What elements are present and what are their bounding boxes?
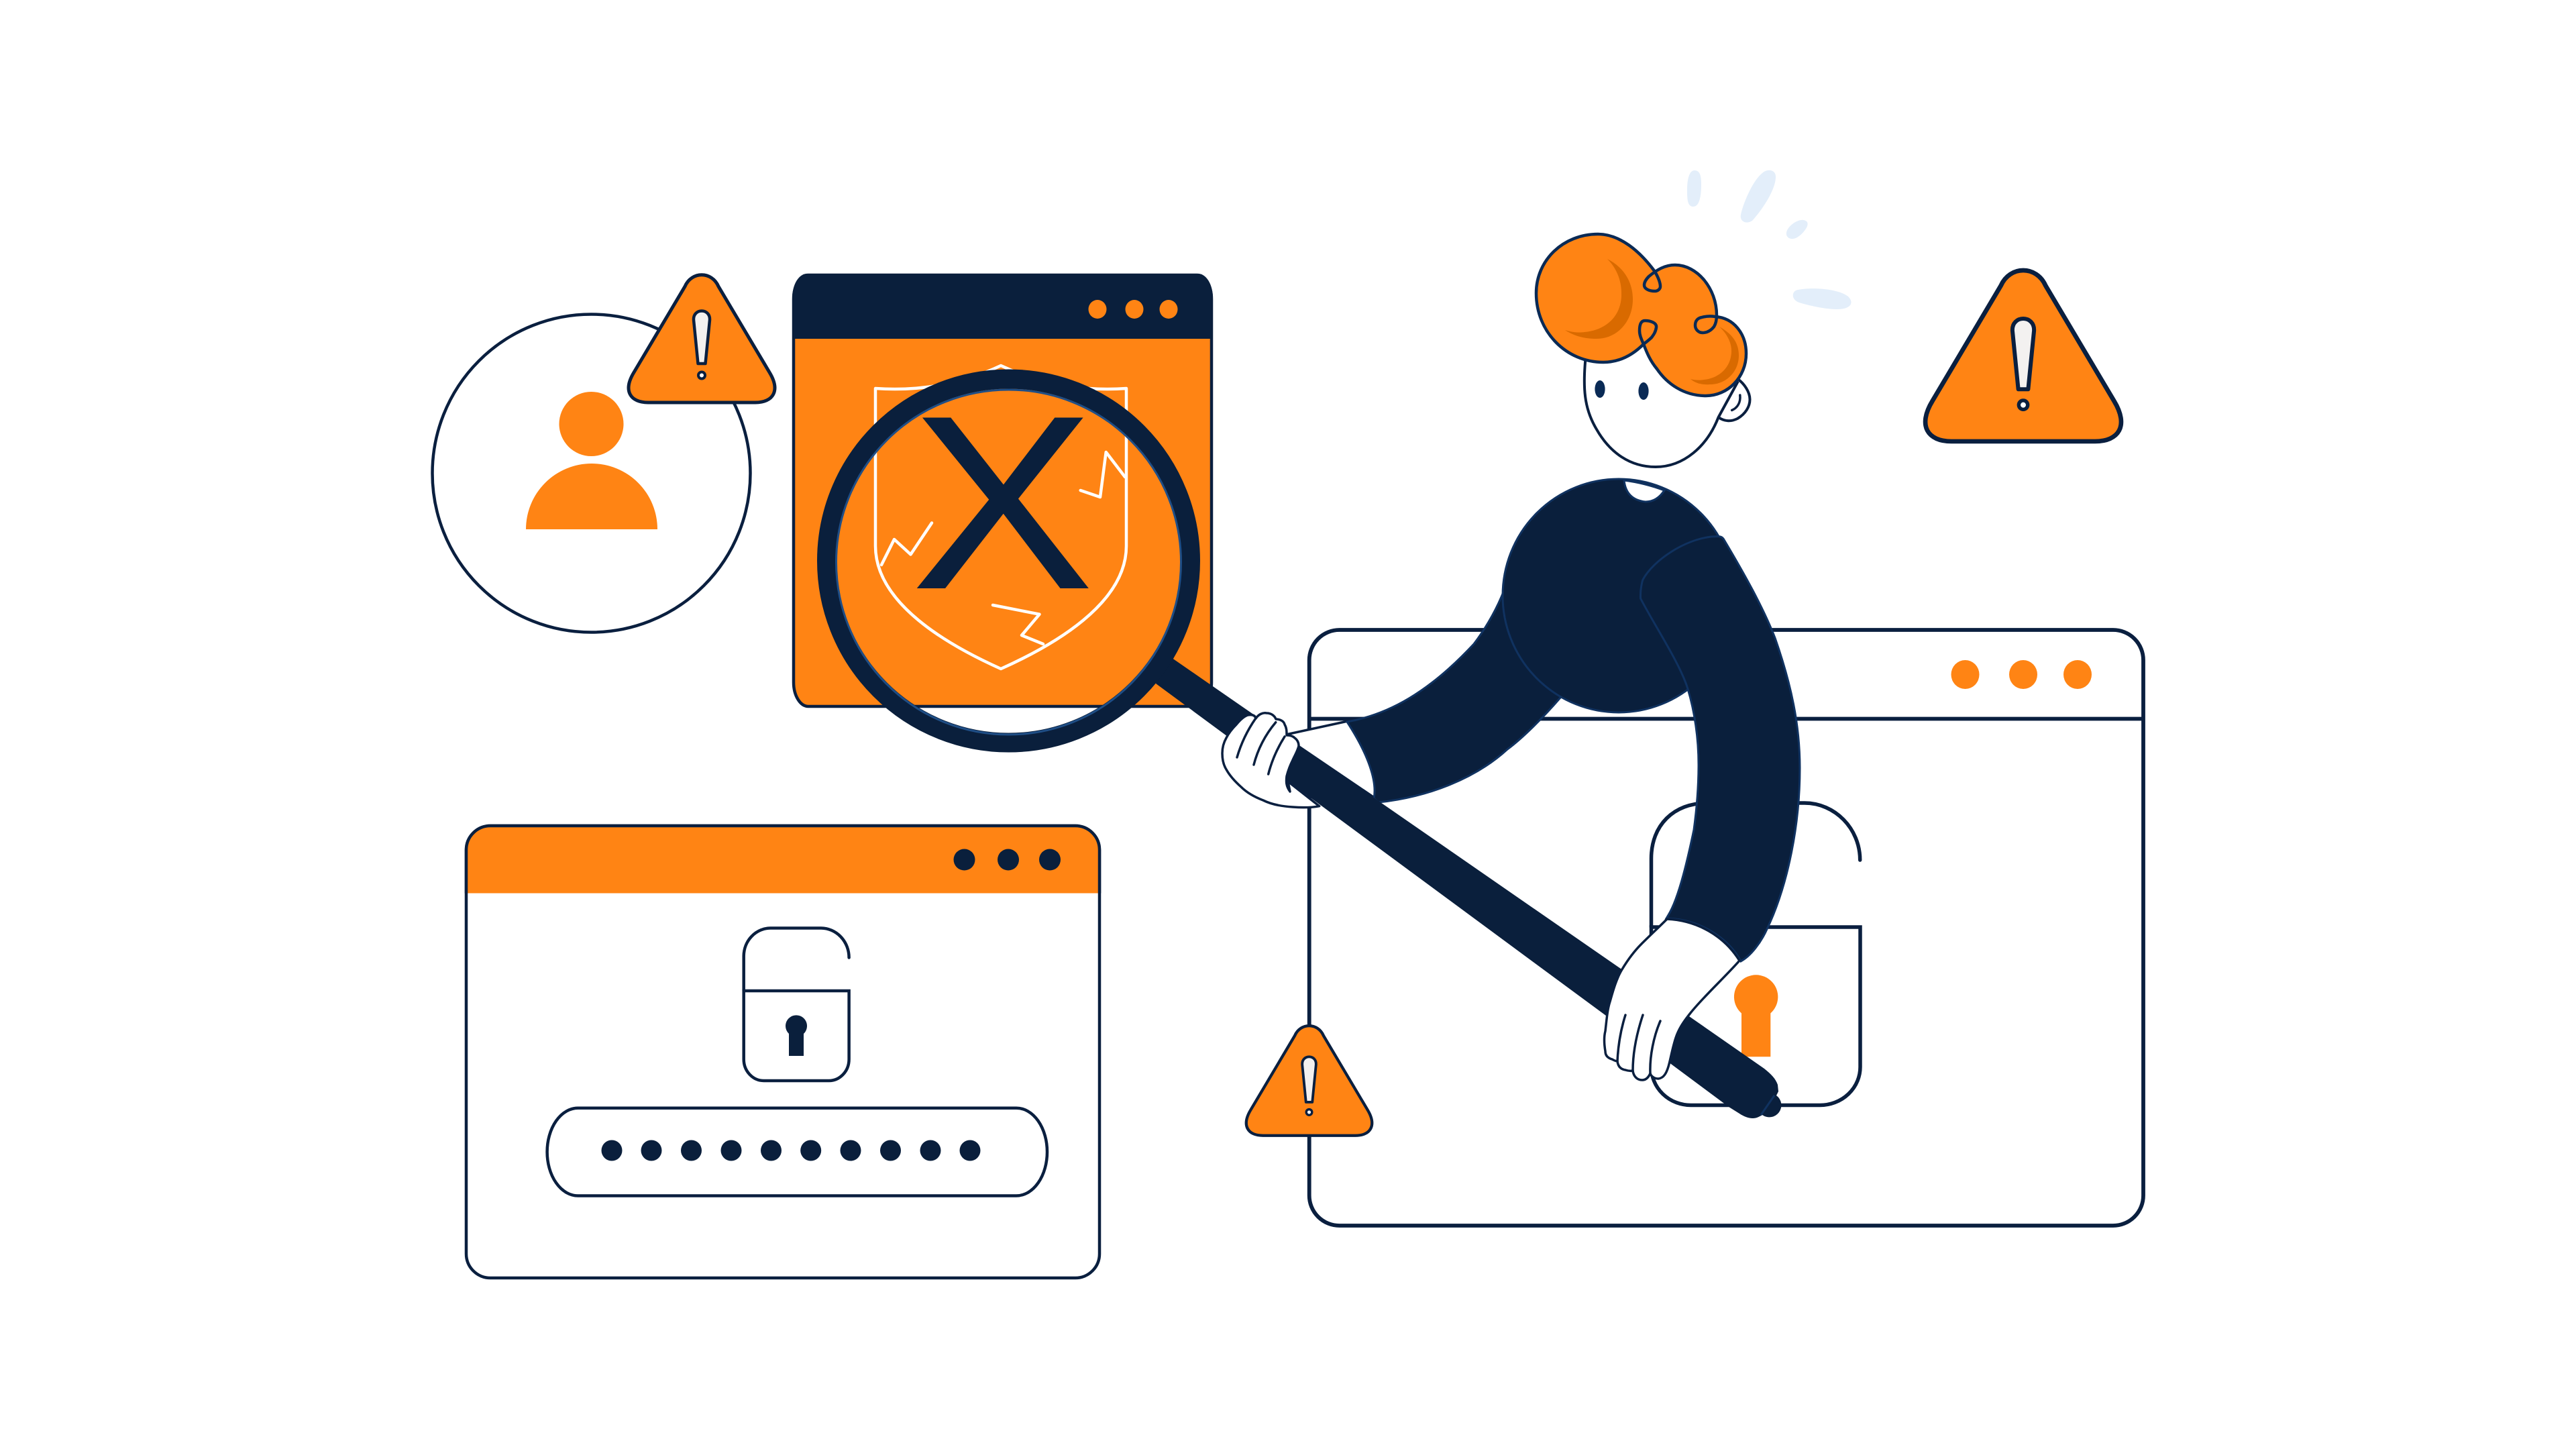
panel: password login window — [466, 826, 1099, 1278]
surprise marks — [1687, 170, 1851, 309]
icon: open padlock — [744, 928, 849, 1081]
character: person with magnifier — [826, 234, 1800, 1118]
window title bar — [792, 274, 1213, 339]
neck — [1624, 480, 1664, 502]
header divider — [1309, 717, 2143, 720]
panel: breached shield window — [792, 274, 1213, 706]
right arm — [1640, 537, 1800, 961]
icon: warning triangle on browser window — [1246, 1026, 1372, 1136]
magnifier handle — [1156, 655, 1781, 1118]
password dots — [601, 1140, 981, 1161]
icon: user shoulders — [526, 464, 657, 529]
left sleeve cuff skin — [1286, 721, 1389, 798]
icon: cracked shield — [875, 366, 1126, 669]
left arm — [1347, 594, 1610, 802]
panel: user profile circle — [432, 314, 750, 632]
icon: warning triangle on user — [629, 275, 775, 402]
icon: user head — [559, 392, 624, 456]
magnifier ring — [826, 379, 1190, 743]
window dots — [1088, 300, 1178, 319]
icon: large padlock — [1651, 803, 1860, 1106]
eyes — [1595, 380, 1649, 400]
right hand — [1605, 919, 1739, 1080]
icon: warning triangle right — [1925, 270, 2121, 441]
icon: keyhole — [1734, 975, 1778, 1057]
password input field — [547, 1108, 1047, 1195]
window title bar — [466, 826, 1099, 894]
torso — [1503, 479, 1735, 712]
window dots — [1951, 660, 2092, 689]
icon: X mark: X — [911, 364, 1094, 641]
left hand — [1222, 713, 1320, 808]
panel: large browser window — [1309, 630, 2143, 1226]
ear — [1711, 379, 1750, 421]
window dots — [954, 849, 1061, 871]
hair — [1536, 234, 1746, 396]
face — [1585, 335, 1737, 467]
